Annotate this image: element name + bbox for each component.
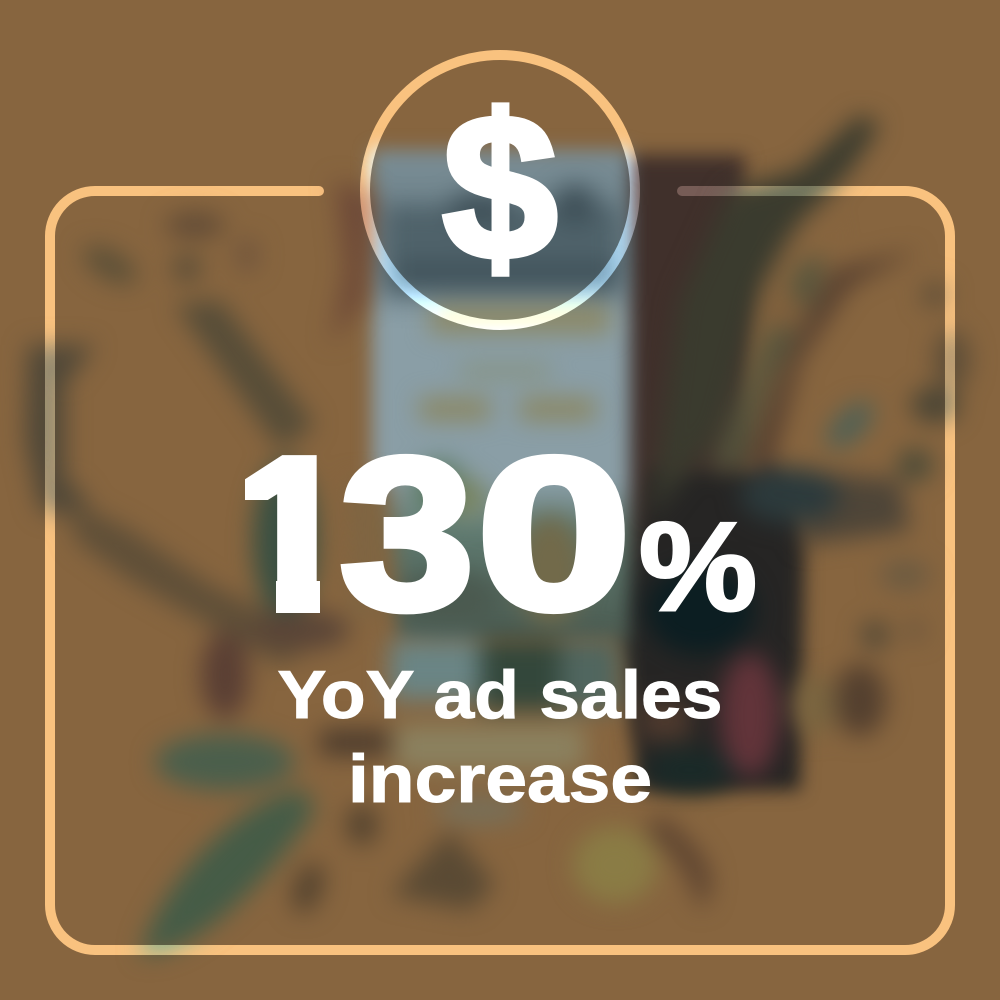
caption line 1: YoY ad sales bbox=[278, 657, 722, 733]
caption line 2: increase bbox=[348, 741, 652, 817]
dark lower block bbox=[645, 565, 755, 655]
icon: dollar sign: $ bbox=[443, 73, 557, 302]
mid-lower pale label bbox=[395, 725, 585, 770]
bottom leaves and herbs bbox=[155, 734, 295, 790]
can bbox=[372, 150, 630, 640]
dark box bbox=[625, 155, 745, 625]
percent sign: % bbox=[639, 496, 757, 637]
right specks bbox=[921, 283, 949, 307]
digit 0: 0 bbox=[477, 413, 631, 654]
can label blotches bbox=[385, 205, 620, 295]
stalks right bbox=[650, 115, 880, 520]
icon ring bbox=[365, 55, 635, 325]
card frame outline bbox=[50, 191, 950, 950]
digit 1: 1 bbox=[232, 413, 352, 654]
left specks and curve bbox=[165, 213, 225, 237]
digit 3: 3 bbox=[340, 413, 474, 654]
big number: 130% bbox=[232, 413, 757, 654]
caption bbox=[278, 657, 722, 817]
